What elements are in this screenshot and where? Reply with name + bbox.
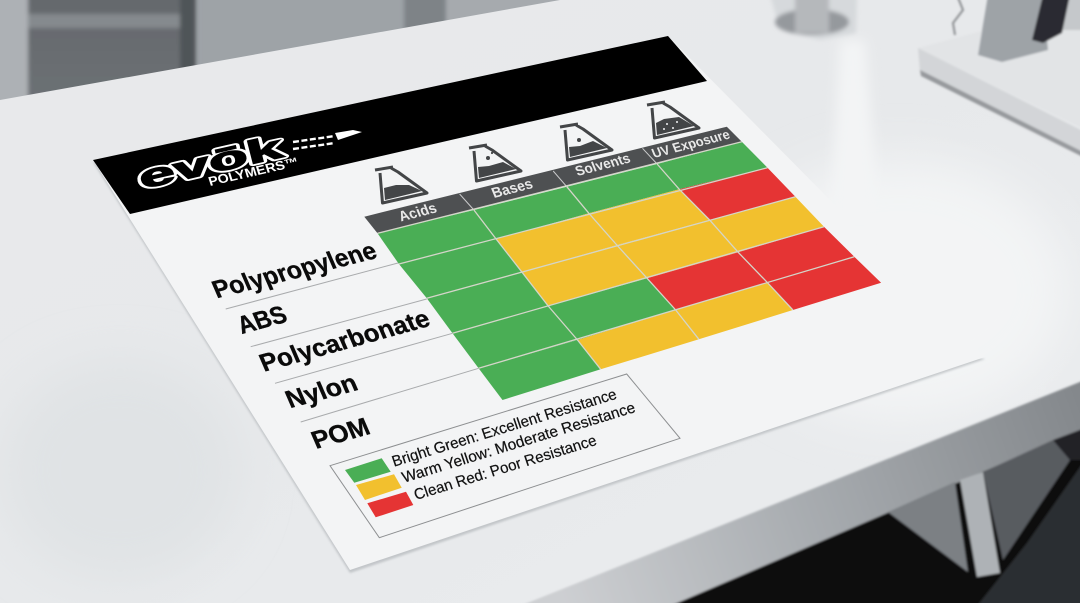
legend swatch: green xyxy=(345,458,391,483)
icon: bases flask xyxy=(469,145,521,181)
legend text: yellow: Warm Yellow: Moderate Resistance xyxy=(400,399,638,487)
row divider lines xyxy=(226,263,479,422)
paper drop shadow xyxy=(93,162,985,573)
background: monitor stand xyxy=(918,0,1080,158)
column label: Acids: Acids xyxy=(396,201,439,225)
row label: Polypropylene: Polypropylene xyxy=(208,238,381,304)
column label: UV Exposure: UV Exposure xyxy=(649,127,732,161)
logo subtitle: POLYMERS™ xyxy=(206,154,301,189)
paper sheet xyxy=(93,36,985,570)
column icons: flasks xyxy=(375,102,699,203)
legend swatch: yellow xyxy=(356,474,402,500)
legend text: red: Clean Red: Poor Resistance xyxy=(412,432,599,504)
logo: bullet trail xyxy=(293,130,362,149)
icon: solvents flask xyxy=(560,124,612,160)
matrix cells xyxy=(378,142,881,400)
logo wordmark: evōk xyxy=(135,128,288,196)
panel: chart paper xyxy=(93,36,985,570)
legend text: green: Bright Green: Excellent Resistance xyxy=(390,386,619,471)
desk front edge and under-desk area xyxy=(520,380,1080,603)
legend xyxy=(330,374,680,538)
chart: resistance matrix xyxy=(364,127,881,400)
icon: UV exposure flask xyxy=(647,102,699,138)
icon: acids flask xyxy=(375,167,427,203)
column label: Bases: Bases xyxy=(489,176,535,202)
column label: Solvents: Solvents xyxy=(573,151,633,179)
row labels xyxy=(208,238,434,455)
logo: Evok Polymers xyxy=(135,128,362,196)
legend box xyxy=(330,374,680,538)
background: blurred room behind desk xyxy=(0,0,1080,120)
background: glass holder on desk xyxy=(770,0,857,40)
legend swatch: red xyxy=(367,492,413,517)
row label: ABS: ABS xyxy=(233,301,291,340)
matrix grid lines xyxy=(378,142,854,369)
logo wordmark outline: evōk xyxy=(135,128,288,196)
header band xyxy=(93,36,707,214)
row label: Polycarbonate: Polycarbonate xyxy=(255,305,434,377)
row label: POM: POM xyxy=(307,414,374,455)
table header row xyxy=(364,127,742,233)
row label: Nylon: Nylon xyxy=(281,370,362,414)
